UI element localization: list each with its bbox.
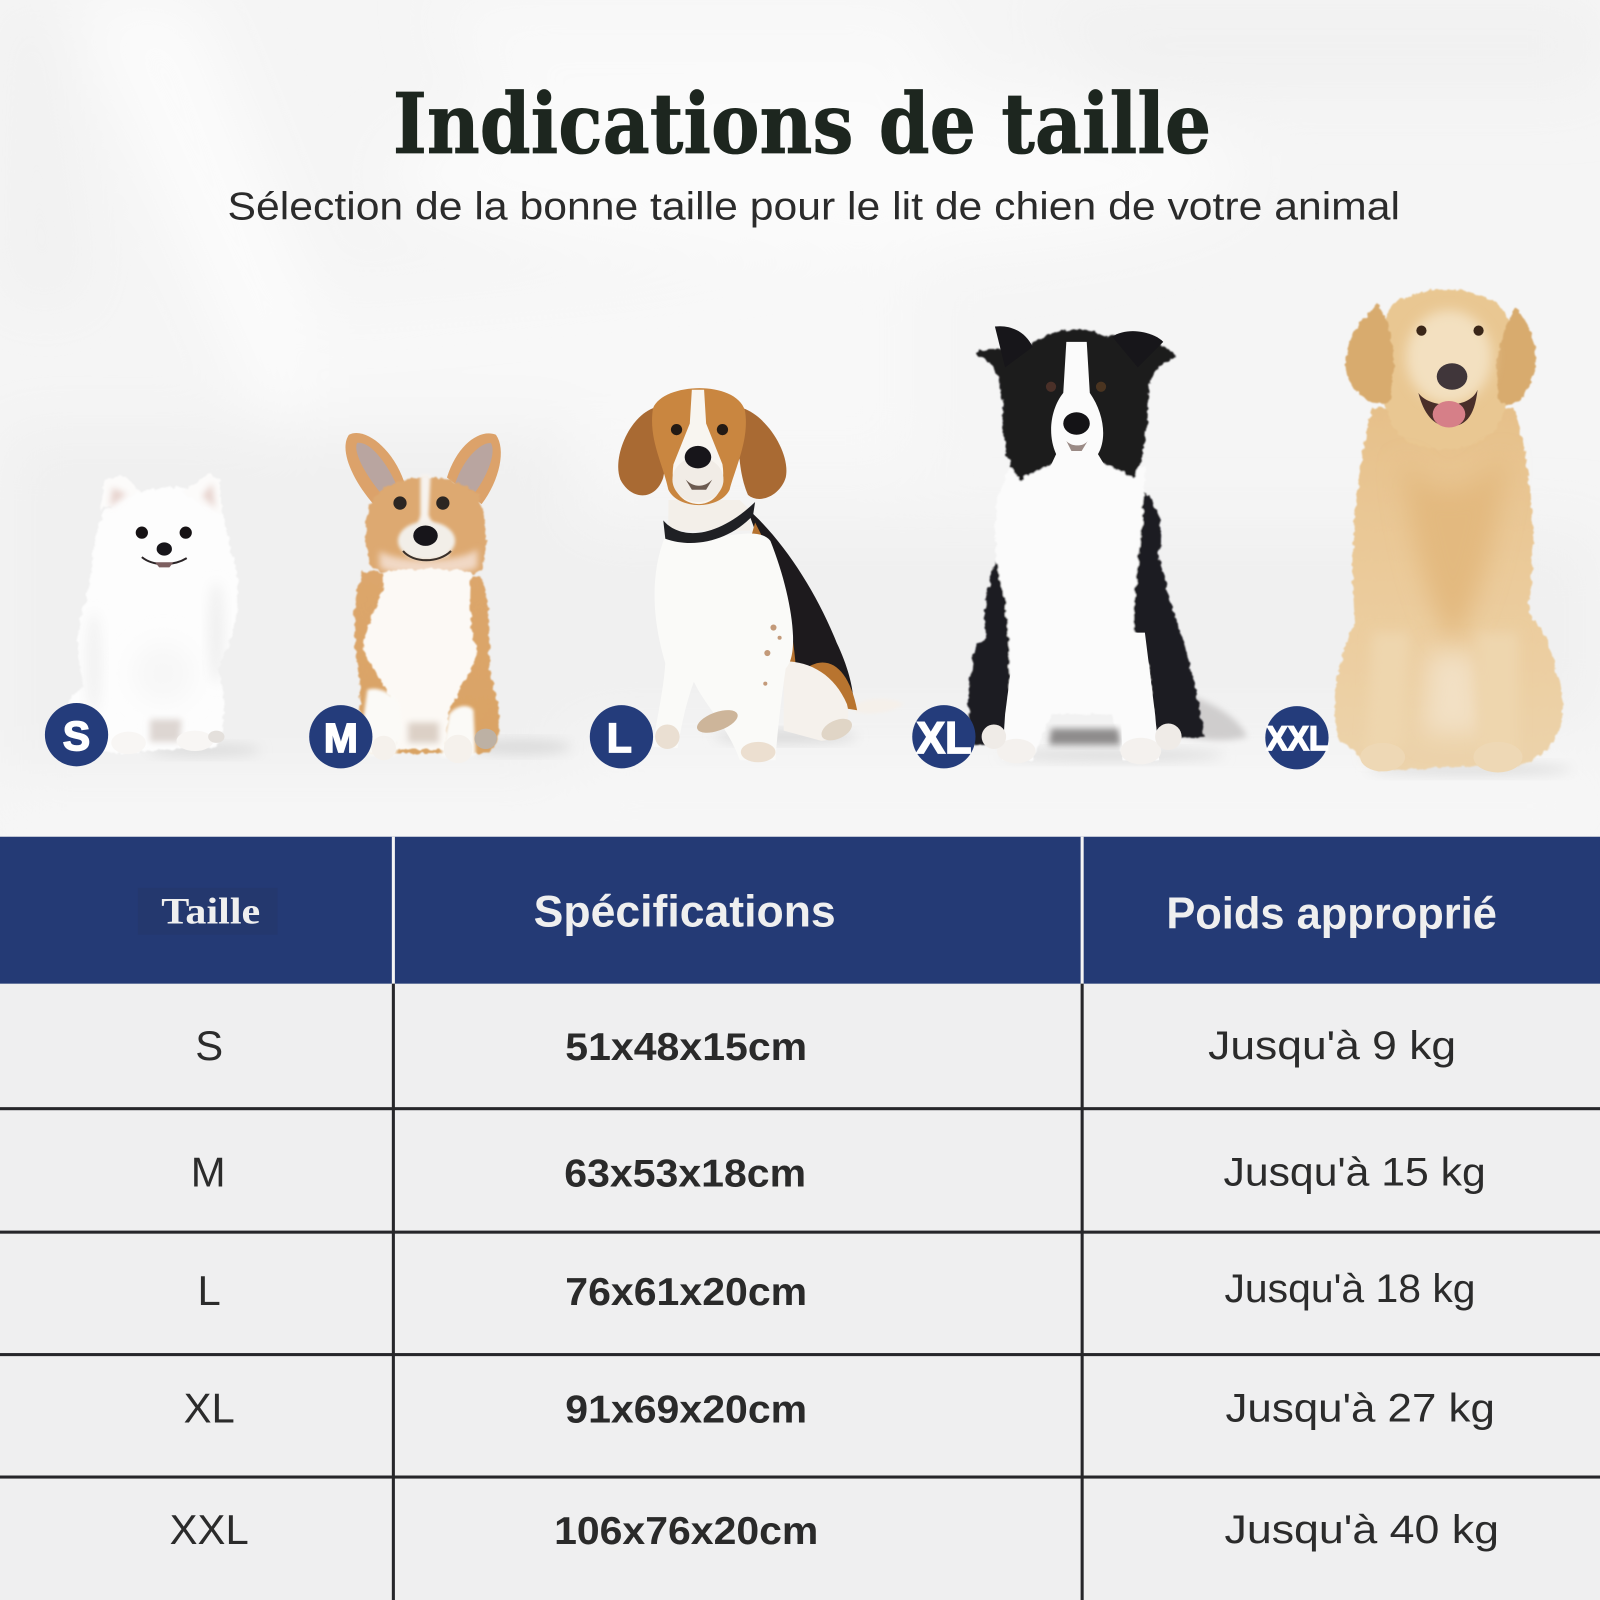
row S: Jusqu'à 9 kg: [1208, 1024, 1456, 1068]
row XL: [184, 1384, 1495, 1431]
row XL: Jusqu'à 27 kg: [1226, 1386, 1495, 1430]
white chest and body: [995, 467, 1158, 760]
table header: Spécifications: [534, 886, 836, 937]
size badges: [45, 703, 1329, 769]
dog S: white pomeranian: [61, 473, 260, 756]
dog XL: border collie: [968, 326, 1247, 764]
head: [652, 388, 746, 505]
badge M: [309, 705, 372, 768]
row M: Jusqu'à 15 kg: [1223, 1151, 1486, 1195]
ears: [345, 433, 404, 504]
badge L: L: [607, 715, 632, 761]
row S: S: [195, 1022, 223, 1069]
subtitle: Sélection de la bonne taille pour le lit de chien de votre animal: [228, 185, 1400, 228]
dog XXL: golden retriever: [1335, 290, 1571, 776]
row XL: XL: [184, 1384, 235, 1431]
head: [366, 477, 486, 578]
table body background: [0, 984, 1600, 1600]
legs: [363, 689, 402, 755]
row XXL: [170, 1506, 1499, 1553]
badge XL: XL: [916, 712, 971, 763]
dog L: beagle: [618, 388, 904, 762]
black flanks: [968, 622, 1026, 745]
row L: [198, 1267, 1476, 1314]
badge S: [45, 703, 108, 766]
row L: Jusqu'à 18 kg: [1224, 1267, 1476, 1311]
head black: [977, 330, 1176, 480]
table: [0, 837, 1600, 1600]
badge M: M: [324, 715, 358, 761]
row XL: 91x69x20cm: [565, 1388, 807, 1431]
title: Indications de taille: [393, 74, 1211, 173]
row S: 51x48x15cm: [565, 1026, 807, 1069]
row M: [191, 1149, 1486, 1196]
row M: M: [191, 1149, 226, 1196]
row L: L: [198, 1267, 221, 1314]
dog M: corgi: [345, 433, 571, 763]
row L: 76x61x20cm: [565, 1271, 807, 1314]
badge L: [590, 705, 653, 768]
row XXL: 106x76x20cm: [554, 1510, 818, 1553]
ears: [618, 408, 666, 495]
badge XXL: [1265, 706, 1329, 769]
row M: 63x53x18cm: [564, 1153, 806, 1196]
head: [1380, 290, 1514, 449]
back saddle: [747, 508, 853, 709]
table header: Taille: [161, 890, 260, 931]
badge XXL: XXL: [1266, 720, 1329, 758]
neck and collar: [668, 500, 750, 531]
row XXL: XXL: [170, 1506, 249, 1553]
table header: Poids approprié: [1166, 888, 1497, 939]
badge S: S: [63, 713, 90, 759]
table header: [0, 837, 1600, 984]
row S: [195, 1022, 1456, 1069]
row XXL: Jusqu'à 40 kg: [1224, 1508, 1499, 1552]
